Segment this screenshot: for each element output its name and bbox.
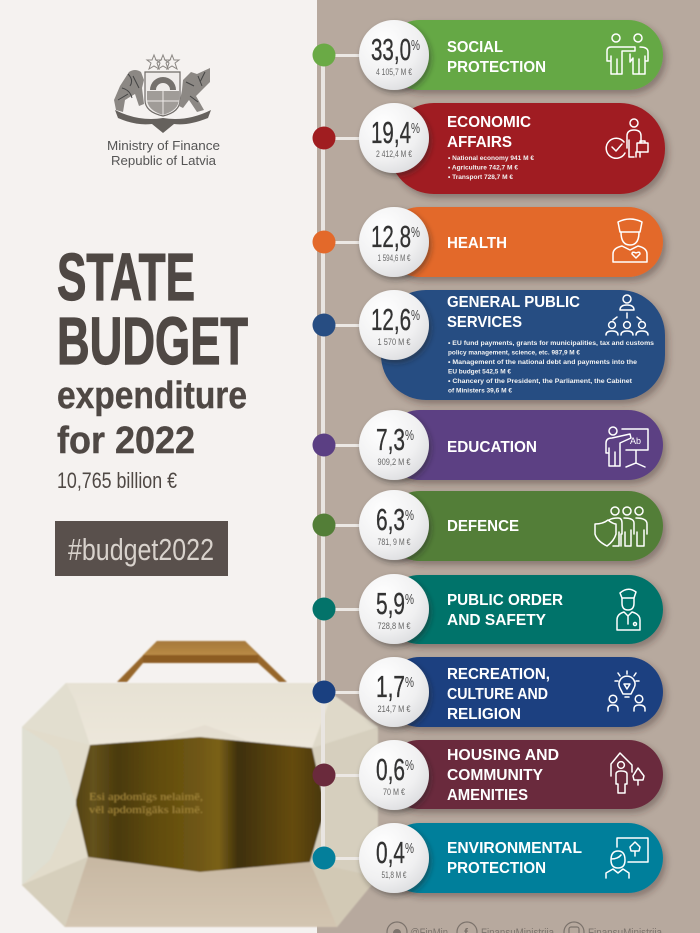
label: CULTURE AND bbox=[447, 686, 548, 703]
label: ENVIRONMENTAL bbox=[447, 840, 582, 857]
value badge bbox=[359, 574, 429, 644]
label: AFFAIRS bbox=[447, 134, 512, 151]
value badge: 1 570 M € bbox=[378, 337, 410, 347]
panel: general public services bbox=[359, 290, 665, 400]
value badge bbox=[359, 740, 429, 810]
breakdown bbox=[448, 155, 534, 181]
background: left light panel bbox=[0, 0, 318, 933]
value badge: % bbox=[405, 757, 414, 774]
title: for 2022 bbox=[57, 420, 195, 462]
value badge: 909,2 M € bbox=[378, 457, 410, 467]
label: PUBLIC ORDER bbox=[447, 592, 563, 609]
icon: police officer bbox=[617, 589, 640, 630]
value badge: % bbox=[405, 591, 414, 608]
text: ministry name bbox=[107, 138, 220, 168]
value badge: 1,7 bbox=[376, 669, 405, 704]
label: SERVICES bbox=[447, 314, 522, 331]
breakdown: • EU fund payments, grants for municipalities, tax and customs bbox=[448, 340, 654, 347]
panel: economic affairs bbox=[359, 103, 665, 194]
value badge: 214,7 M € bbox=[378, 704, 410, 714]
hashtag badge bbox=[55, 521, 228, 576]
icon: teacher at board: Ab bbox=[630, 436, 641, 446]
panel: defence bbox=[359, 490, 663, 561]
panel: environmental protection bbox=[359, 823, 663, 893]
title: expenditure bbox=[57, 375, 247, 417]
value badge: 0,6 bbox=[376, 752, 405, 787]
value badge bbox=[359, 490, 429, 560]
label: COMMUNITY bbox=[447, 767, 543, 784]
label: AMENITIES bbox=[447, 787, 528, 804]
icon: shield and soldiers bbox=[595, 507, 647, 546]
label: RELIGION bbox=[447, 706, 521, 723]
icon: coat of arms bbox=[114, 55, 211, 133]
subtitle: total amount: 10,765 billion € bbox=[57, 468, 177, 493]
title bbox=[57, 240, 248, 462]
label: SOCIAL bbox=[447, 39, 503, 56]
label: PROTECTION bbox=[447, 860, 546, 877]
icon: lightbulb and two people bbox=[608, 671, 645, 711]
background: right taupe panel bbox=[317, 0, 700, 933]
label: GENERAL PUBLIC bbox=[447, 294, 580, 311]
breakdown: • Management of the national debt and payments into the bbox=[448, 359, 637, 366]
value badge: 781, 9 M € bbox=[378, 537, 410, 547]
text: ministry name: Republic of Latvia bbox=[111, 153, 217, 168]
title: BUDGET bbox=[57, 304, 248, 379]
value badge: % bbox=[405, 427, 414, 444]
label bbox=[447, 747, 559, 804]
value badge: 51,8 M € bbox=[382, 870, 406, 880]
icon: hierarchy bbox=[606, 295, 648, 335]
panel: housing and community amenities bbox=[359, 740, 663, 810]
panel: education bbox=[359, 410, 663, 480]
engraved text: Esi apdomīgs nelaimē, bbox=[89, 792, 203, 803]
label bbox=[447, 592, 563, 629]
icon: person with tree on screen bbox=[606, 838, 648, 878]
engraved text: vēl apdomīgāks laimē. bbox=[89, 805, 203, 816]
panel: health bbox=[359, 207, 663, 277]
value badge: 4 105,7 M € bbox=[376, 67, 412, 77]
value badge bbox=[359, 657, 429, 727]
breakdown: EU budget 542,5 M € bbox=[448, 368, 511, 376]
value badge: 12,6 bbox=[371, 302, 411, 337]
icon: person, house and tree bbox=[611, 753, 644, 793]
breakdown: • Transport 728,7 M € bbox=[448, 174, 513, 181]
gold plate bbox=[76, 737, 322, 872]
handle bbox=[117, 641, 287, 682]
value badge: 1 594,6 M € bbox=[378, 253, 410, 263]
value badge: 7,3 bbox=[376, 422, 405, 457]
breakdown bbox=[448, 340, 654, 394]
icon: teacher at board bbox=[606, 427, 648, 467]
label bbox=[447, 294, 580, 331]
illustration: wooden briefcase bbox=[22, 641, 378, 927]
logo: coat of arms and ministry name bbox=[107, 55, 220, 168]
label bbox=[447, 840, 582, 877]
timeline: vertical line, connectors and dots bbox=[312, 44, 365, 870]
value badge bbox=[359, 823, 429, 893]
value badge: 2 412,4 M € bbox=[376, 149, 412, 159]
value badge: 0,4 bbox=[376, 835, 405, 870]
engraved text bbox=[89, 792, 203, 816]
label: HOUSING AND bbox=[447, 747, 559, 764]
breakdown: • Agriculture 742,7 M € bbox=[448, 164, 518, 172]
panel: recreation, culture and religion bbox=[359, 657, 663, 727]
panel: social protection bbox=[359, 20, 663, 90]
label: PROTECTION bbox=[447, 59, 546, 76]
label: ECONOMIC bbox=[447, 114, 531, 131]
icon: nurse bbox=[613, 219, 647, 262]
footer: social media handles bbox=[387, 922, 663, 933]
value badge bbox=[359, 207, 429, 277]
value badge: 70 M € bbox=[383, 787, 405, 797]
breakdown: of Ministers 39,6 M € bbox=[448, 388, 512, 394]
value badge: % bbox=[411, 224, 420, 241]
title: STATE bbox=[57, 240, 195, 315]
value badge bbox=[359, 103, 429, 173]
value badge: 12,8 bbox=[371, 219, 411, 254]
icon: person with check and briefcase bbox=[606, 119, 648, 158]
label: EDUCATION bbox=[447, 439, 537, 456]
label bbox=[447, 666, 550, 723]
value badge: 728,8 M € bbox=[378, 621, 410, 631]
value badge: % bbox=[405, 674, 414, 691]
value badge: % bbox=[411, 37, 420, 54]
value badge bbox=[359, 410, 429, 480]
label bbox=[447, 39, 546, 76]
value badge: 33,0 bbox=[371, 32, 411, 67]
label: RECREATION, bbox=[447, 666, 550, 683]
label: AND SAFETY bbox=[447, 612, 546, 629]
label bbox=[447, 114, 531, 151]
breakdown: • National economy 941 M € bbox=[448, 155, 534, 162]
value badge bbox=[359, 290, 429, 360]
breakdown: • Chancery of the President, the Parliament, the Cabinet bbox=[448, 378, 633, 385]
breakdown: policy management, science, etc. 987,9 M € bbox=[448, 350, 580, 356]
value badge: % bbox=[405, 840, 414, 857]
value badge: 19,4 bbox=[371, 115, 411, 150]
label: DEFENCE bbox=[447, 518, 519, 535]
text: ministry name: Ministry of Finance bbox=[107, 138, 220, 153]
value badge: 6,3 bbox=[376, 502, 405, 537]
panel: public order and safety bbox=[359, 574, 663, 644]
hashtag badge: #budget2022 bbox=[68, 532, 214, 567]
value badge: % bbox=[411, 307, 420, 324]
icon: two people bbox=[607, 34, 648, 74]
case body bbox=[22, 683, 378, 927]
value badge: % bbox=[405, 507, 414, 524]
value badge bbox=[359, 20, 429, 90]
label: HEALTH bbox=[447, 235, 507, 252]
value badge: 5,9 bbox=[376, 586, 405, 621]
value badge: % bbox=[411, 120, 420, 137]
